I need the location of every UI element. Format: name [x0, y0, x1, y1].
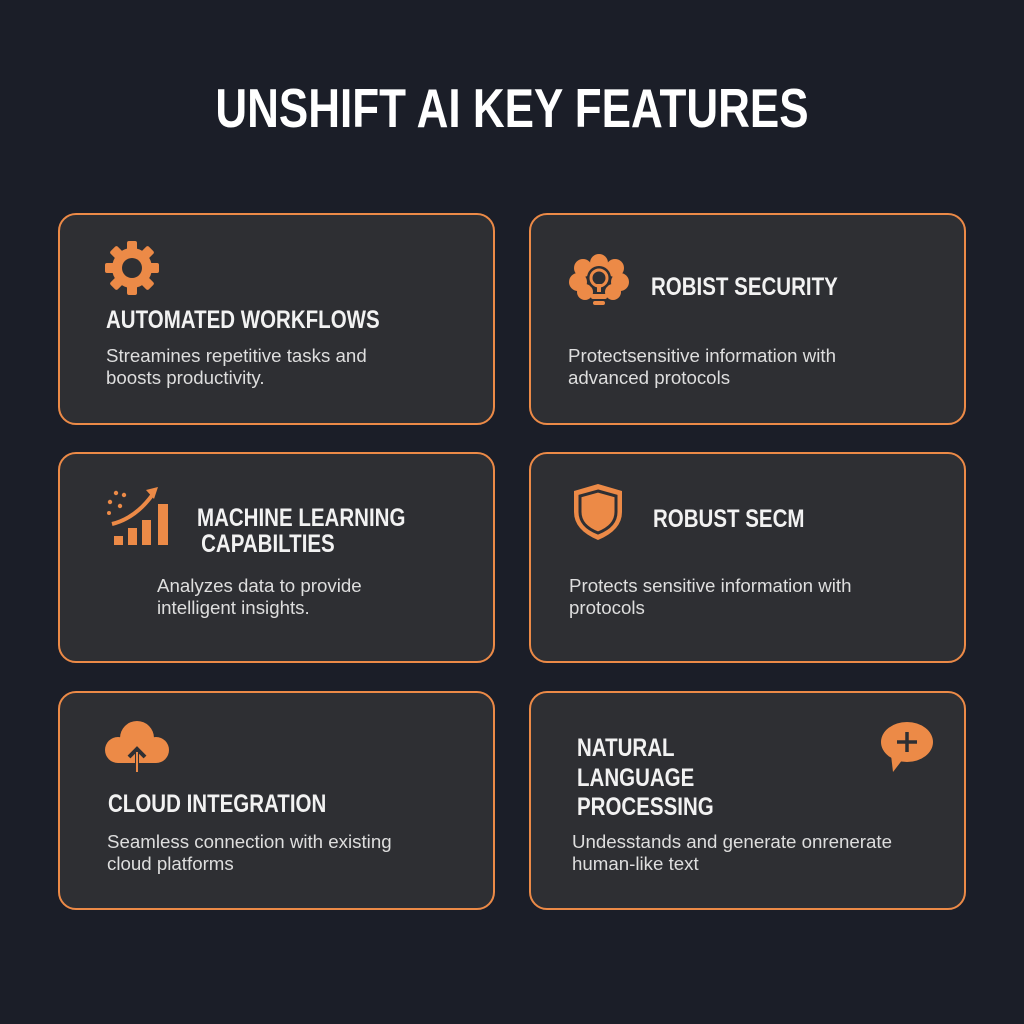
icon: gear — [105, 241, 159, 295]
text: cloud integration: Seamless connection with existing — [107, 831, 392, 852]
title: UNSHIFT AI KEY FEATURES — [215, 77, 809, 139]
text: automated workflows — [106, 345, 367, 388]
text: automated workflows: boosts productivity. — [106, 367, 265, 388]
panel: natural language processing — [529, 691, 966, 910]
heading: automated workflows: AUTOMATED WORKFLOWS — [106, 306, 380, 334]
text: cloud integration: cloud platforms — [107, 853, 234, 874]
text: cloud integration — [107, 831, 392, 874]
icon: growth chart — [107, 487, 168, 545]
panel: robist security — [529, 213, 966, 425]
text: robist security: advanced protocols — [568, 367, 730, 388]
icon: shield — [574, 484, 622, 540]
heading: machine learning: CAPABILTIES — [201, 530, 335, 558]
text: automated workflows: Streamines repetitive tasks and — [106, 345, 367, 366]
heading: natural language processing: NATURAL — [577, 734, 675, 762]
heading: machine learning — [197, 504, 405, 558]
text: robust secm — [569, 575, 852, 618]
text: natural language processing: human-like text — [572, 853, 699, 874]
text: robust secm: protocols — [569, 597, 645, 618]
icon: speech bubble plus — [881, 722, 933, 772]
heading: machine learning: MACHINE LEARNING — [197, 504, 405, 532]
heading: natural language processing — [577, 734, 714, 821]
text: natural language processing: Undesstands and generate onrenerate — [572, 831, 892, 852]
icon: cloud upload — [105, 721, 169, 772]
text: natural language processing — [572, 831, 892, 874]
panel: automated workflows — [58, 213, 495, 425]
heading: natural language processing: PROCESSING — [577, 793, 714, 821]
heading: natural language processing: LANGUAGE — [577, 764, 694, 792]
text: robist security: Protect​sensitive information with — [568, 345, 836, 366]
heading: cloud integration: CLOUD INTEGRATION — [108, 790, 326, 818]
panel: robust secm — [529, 452, 966, 663]
text: machine learning — [157, 575, 362, 618]
text: robust secm: Protects sensitive information with — [569, 575, 852, 596]
text: machine learning: Analyzes data to provide — [157, 575, 362, 596]
text: robist security — [568, 345, 836, 388]
icon: brain bulb — [569, 254, 629, 305]
heading: robust secm: ROBUST SECM — [653, 505, 804, 533]
heading: robist security: ROBIST SECURITY — [651, 273, 838, 301]
panel: machine learning — [58, 452, 495, 663]
text: machine learning: intelligent insights. — [157, 597, 310, 618]
panel: cloud integration — [58, 691, 495, 910]
